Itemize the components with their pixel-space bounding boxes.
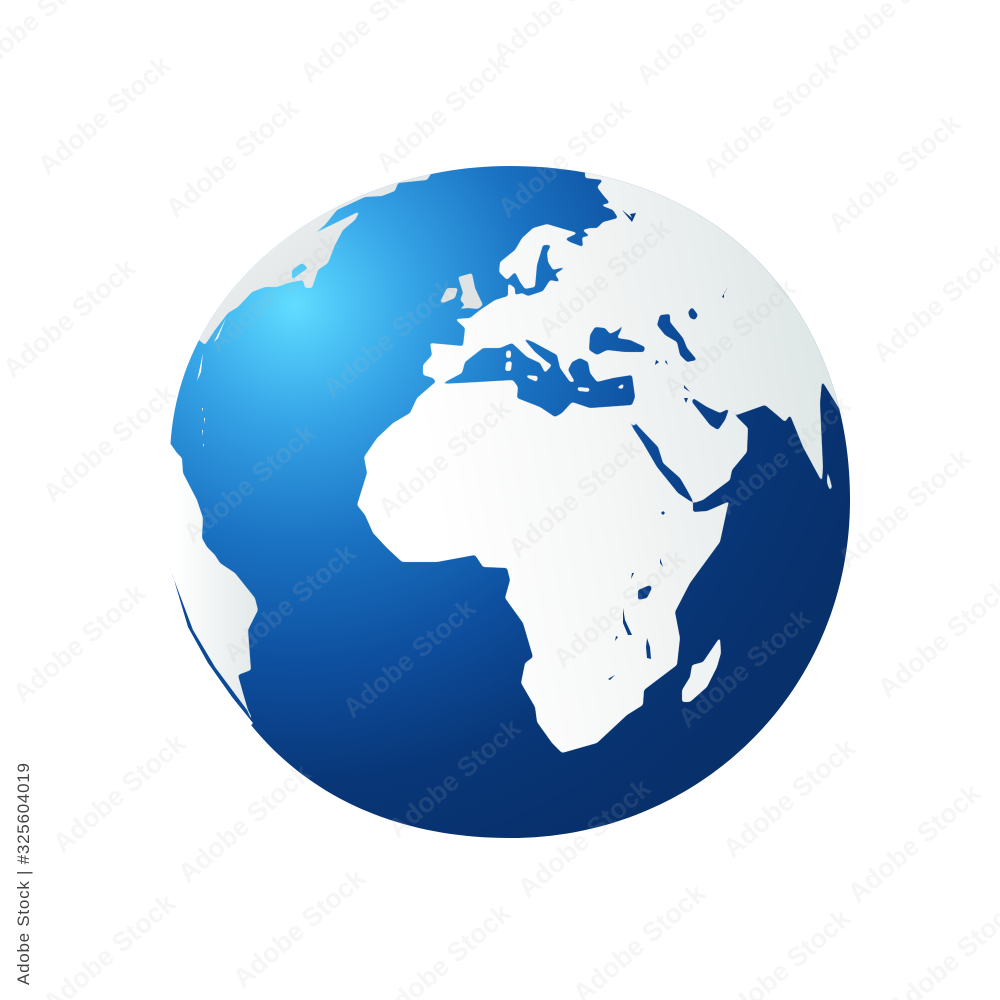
watermark: Adobe Stock bbox=[532, 212, 677, 344]
watermark: Adobe Stock bbox=[32, 49, 177, 181]
watermark: Adobe Stock bbox=[202, 227, 347, 359]
islands bbox=[505, 350, 832, 491]
watermark: Adobe Stock bbox=[502, 432, 647, 564]
watermark: Adobe Stock bbox=[832, 442, 977, 574]
Ireland bbox=[440, 288, 458, 303]
watermark: Adobe Stock bbox=[842, 777, 987, 909]
watermark: Adobe Stock bbox=[492, 92, 637, 224]
watermark: Adobe Stock bbox=[317, 272, 462, 404]
watermark: Adobe Stock bbox=[657, 272, 802, 404]
Greenland and North America bbox=[199, 174, 431, 344]
watermark: Adobe Stock bbox=[822, 107, 967, 239]
watermark: Adobe Stock bbox=[672, 602, 817, 734]
watermark: Adobe Stock bbox=[712, 389, 857, 521]
watermark: Adobe Stock bbox=[512, 772, 657, 904]
watermark: Adobe Stock bbox=[382, 712, 527, 844]
watermark: Adobe Stock bbox=[47, 727, 192, 859]
ocean sphere bbox=[170, 166, 850, 838]
watermark: Adobe Stock bbox=[0, 252, 142, 384]
watermark: Adobe Stock bbox=[160, 92, 305, 224]
watermark: Adobe Stock bbox=[227, 862, 372, 994]
watermark: Adobe Stock bbox=[370, 47, 515, 179]
watermark: Adobe Stock bbox=[7, 577, 152, 709]
watermark: Adobe Stock bbox=[372, 392, 517, 524]
watermark: Adobe Stock bbox=[547, 542, 692, 674]
stock image id: Adobe Stock | #325604019 bbox=[14, 763, 33, 985]
watermark: Adobe Stock bbox=[217, 537, 362, 669]
background beyond the western rim bbox=[150, 573, 253, 740]
watermark: Adobe Stock bbox=[172, 757, 317, 889]
Great Britain bbox=[457, 273, 483, 310]
watermark: Adobe Stock bbox=[177, 417, 322, 549]
lakes and small inland waters bbox=[608, 210, 728, 680]
watermark: Adobe Stock bbox=[337, 592, 482, 724]
South America bbox=[160, 443, 258, 720]
watermark: Adobe Stock bbox=[697, 52, 842, 184]
Madagascar bbox=[682, 637, 721, 702]
watermark: Adobe Stock bbox=[717, 732, 862, 864]
landmass: Eurasia and Africa bbox=[357, 150, 870, 753]
watermark: Adobe Stock bbox=[37, 377, 182, 509]
west coast rim band bbox=[172, 573, 253, 723]
globe bbox=[150, 150, 870, 838]
Atlantic rim slivers bbox=[197, 318, 226, 447]
